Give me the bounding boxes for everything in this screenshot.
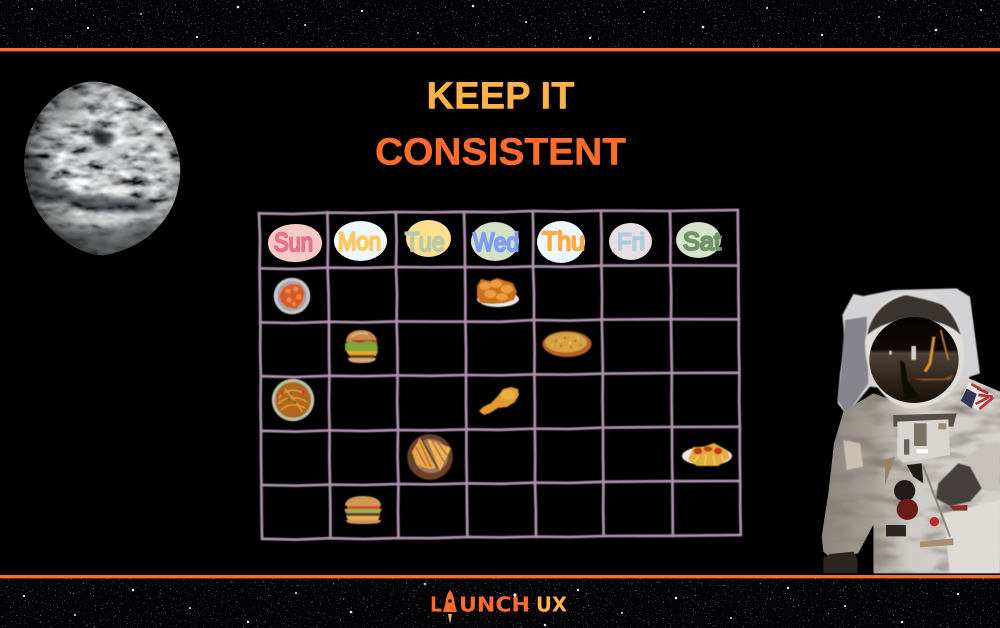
title — [375, 76, 626, 174]
food: fried drumstick — [479, 387, 519, 415]
astronaut glove left — [823, 552, 857, 573]
logo wordmark UNCH: UNCH — [459, 592, 530, 616]
astronaut helmet dark top — [867, 294, 961, 335]
weekly calendar grid — [259, 210, 741, 540]
astronaut visor — [869, 317, 959, 403]
earth photo — [20, 78, 187, 258]
astronaut chest control unit — [893, 413, 957, 463]
day label: Fri: Fri — [617, 229, 645, 256]
astronaut lower chest gear — [885, 457, 953, 547]
astronaut photo — [820, 288, 1000, 575]
food: spicy chicken bowl — [274, 278, 310, 314]
day label: Sat — [676, 222, 721, 258]
day label: Mon — [334, 221, 387, 261]
day label: Thu — [537, 221, 585, 263]
food: loaded fries — [682, 443, 732, 466]
day label: Tue: Tue — [405, 227, 445, 257]
astronaut right glove — [936, 463, 982, 506]
astronaut left backpack shadow — [838, 317, 868, 415]
day label: Sun — [268, 224, 322, 262]
american flag patch — [961, 382, 995, 411]
astronaut inner arm gap — [858, 525, 873, 573]
starfield band: bottom — [0, 578, 1000, 628]
food: toasted sandwich on plate — [407, 434, 453, 480]
logo rocket icon — [443, 590, 457, 624]
day label: Sat: Sat — [683, 228, 721, 256]
day label: Thu: Thu — [542, 226, 585, 256]
astronaut right arm — [960, 443, 1000, 492]
food: pizza — [542, 331, 592, 357]
glove wrist red band — [949, 505, 967, 511]
bottom orange rule — [0, 575, 1000, 578]
day label: Wed: Wed — [473, 227, 519, 257]
food: noodle bowl — [272, 379, 314, 421]
food: fried chicken plate — [477, 278, 519, 307]
astronaut suit wrinkles — [820, 377, 1000, 575]
logo: LaunchUX — [430, 590, 567, 624]
food: hamburger — [344, 496, 382, 524]
starfield band: top — [0, 0, 1000, 48]
day label: Sun: Sun — [274, 227, 313, 257]
logo wordmark UX: UX — [536, 592, 567, 616]
top orange rule — [0, 48, 1000, 51]
title line 1: KEEP IT — [426, 76, 574, 118]
food: cheeseburger with lettuce — [345, 330, 378, 363]
day label: Wed — [471, 222, 519, 261]
day label: Fri — [609, 223, 652, 260]
astronaut suit body — [822, 377, 1000, 573]
astronaut helmet shell — [865, 292, 964, 408]
logo letter L: L — [430, 592, 442, 616]
day label: Mon: Mon — [338, 228, 381, 256]
visor reflection — [889, 330, 953, 400]
title line 2: CONSISTENT — [375, 132, 626, 174]
astronaut helmet top highlight — [900, 292, 952, 310]
astronaut backpack — [838, 288, 980, 415]
